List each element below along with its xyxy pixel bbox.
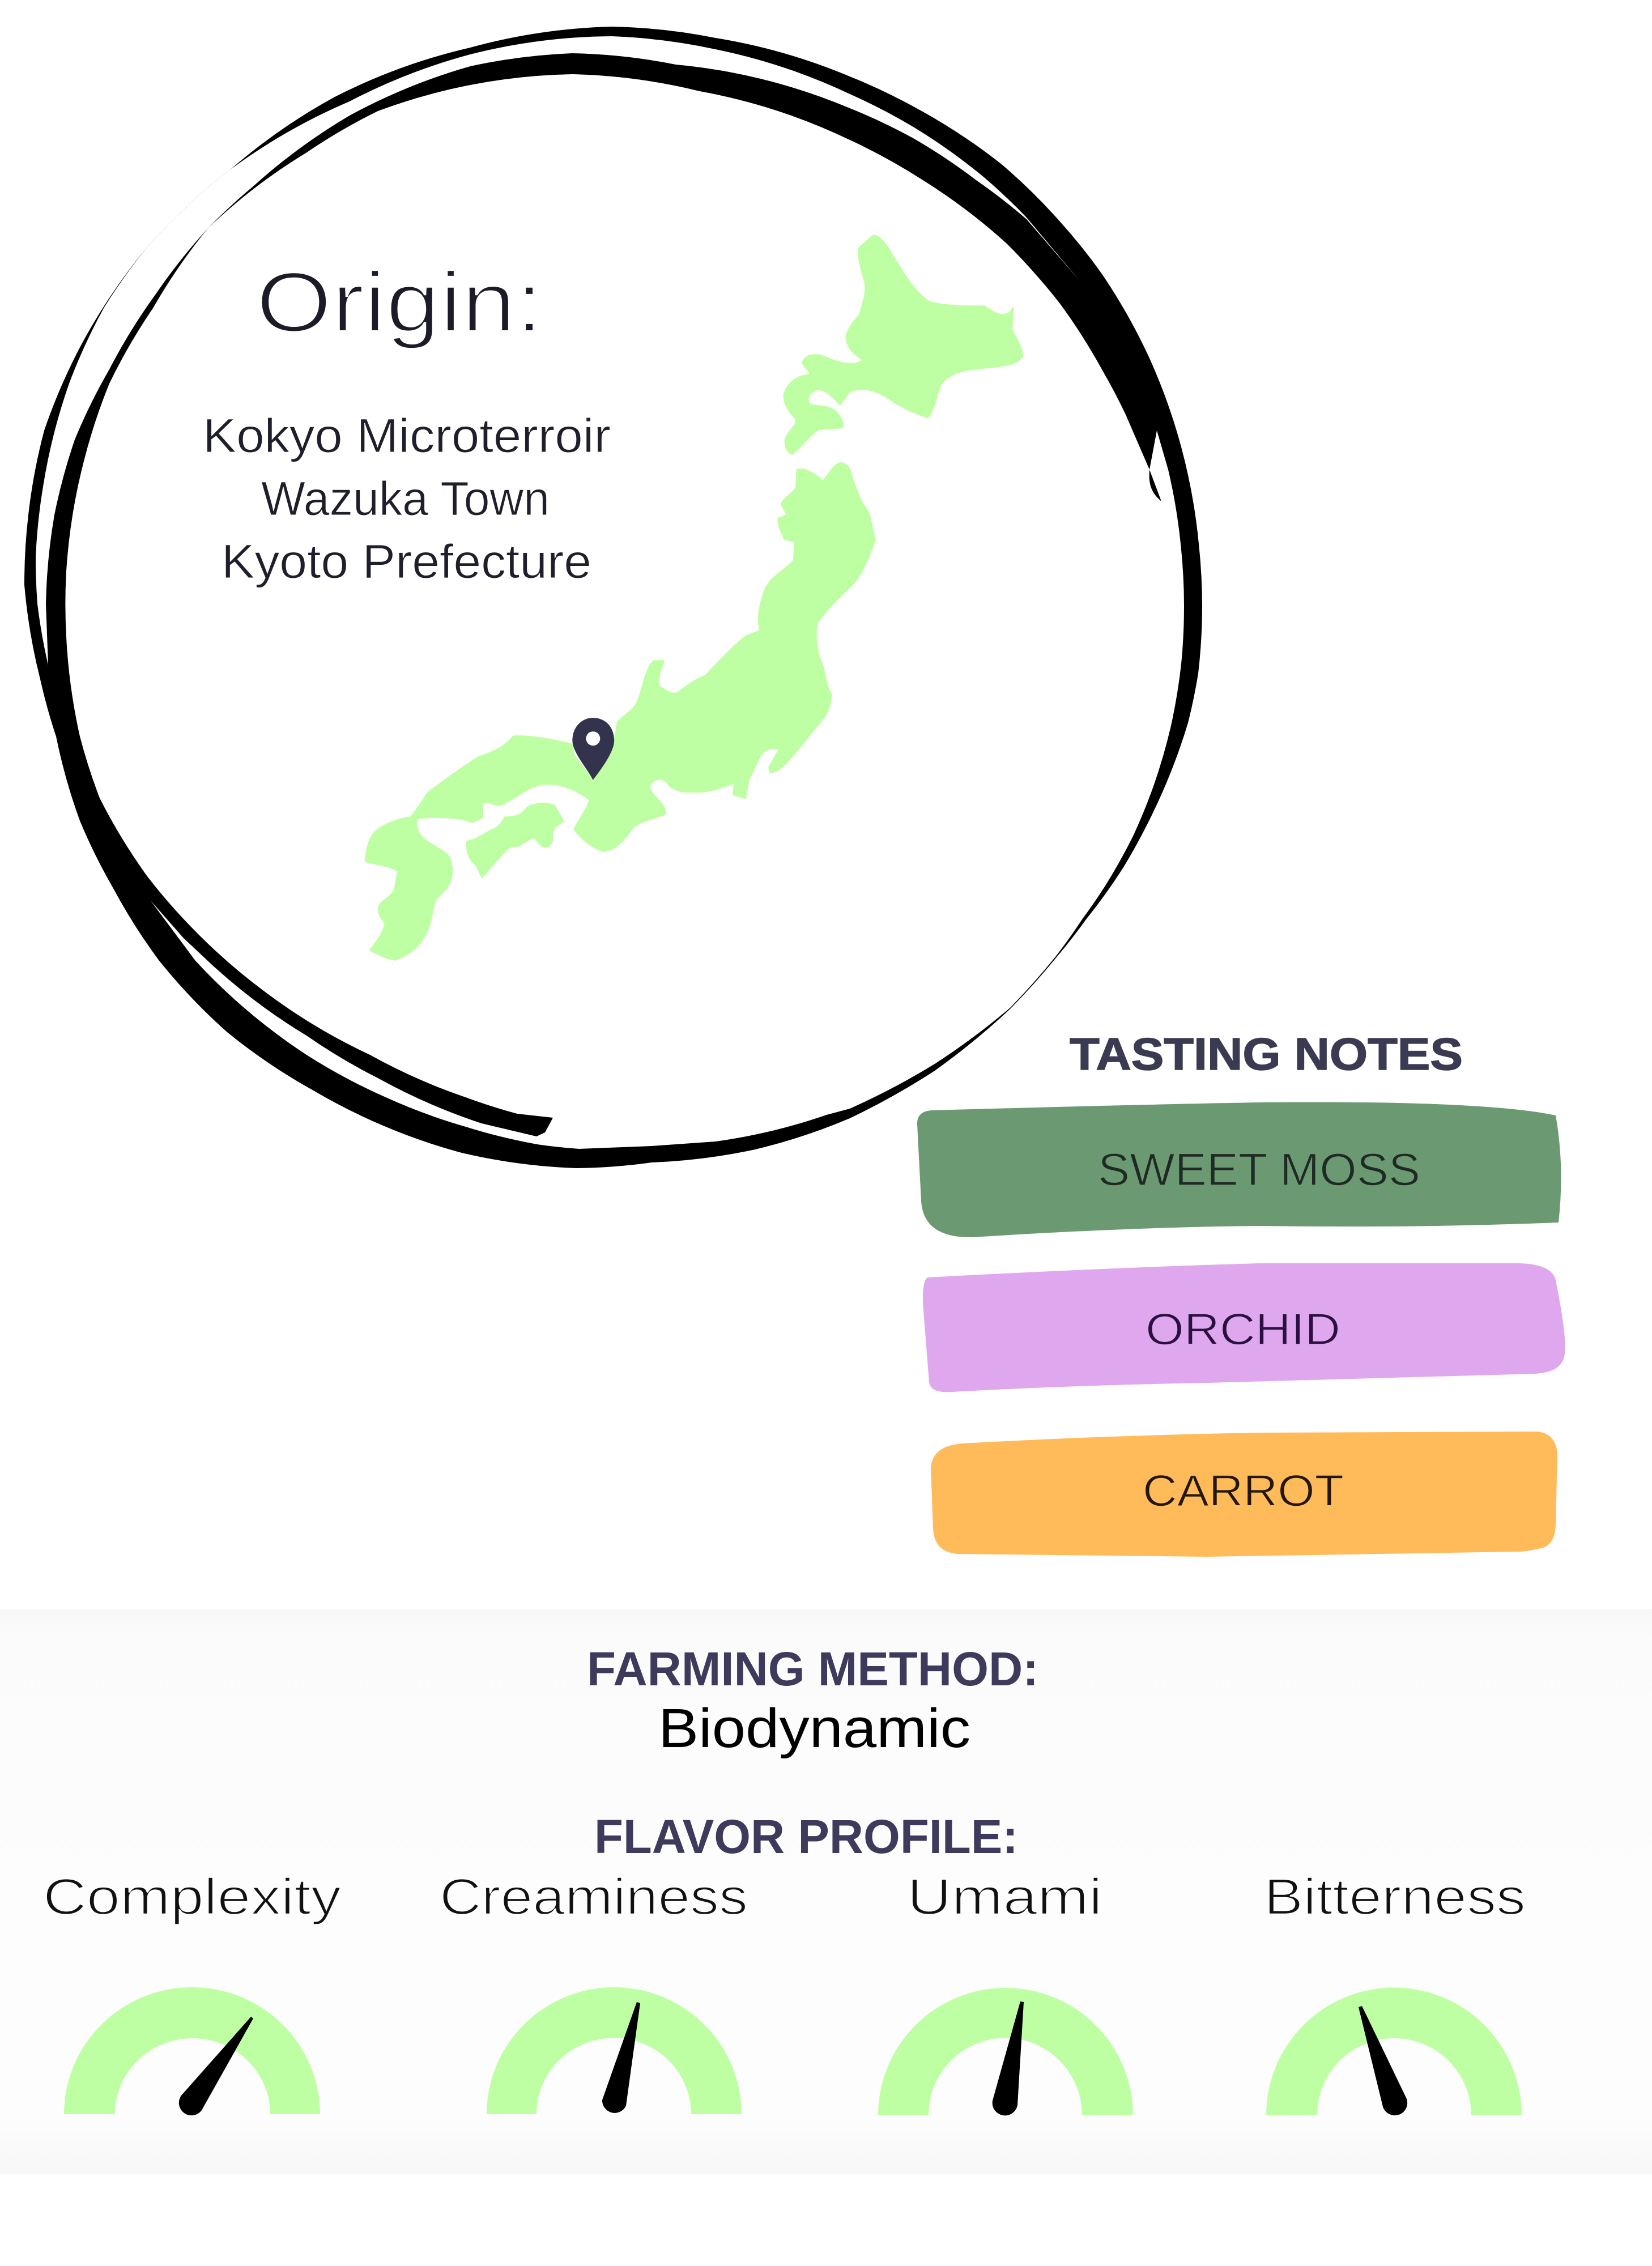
hand-drawn brush circle	[24, 27, 1202, 1168]
gauge: umami	[878, 1869, 1133, 2115]
heading: farming method: FARMING METHOD:	[587, 1642, 1038, 1696]
map: Hokkaido	[784, 235, 1023, 455]
gauge: complexity: Complexity	[43, 1869, 341, 1926]
gauge: creaminess: Creaminess	[440, 1869, 748, 1926]
tasting note: orchid	[923, 1263, 1565, 1392]
tasting note: orchid: ORCHID	[1146, 1304, 1340, 1354]
text block: origin details: Wazuka Town	[261, 472, 550, 525]
gauge: bitterness	[1264, 1869, 1526, 2115]
map: Shikoku	[466, 803, 564, 879]
text block: origin details: Kyoto Prefecture	[222, 535, 591, 588]
gauge: umami: Umami	[907, 1869, 1102, 1926]
map: Honshu and Kyushu	[365, 462, 876, 961]
text: biodynamic: Biodynamic	[658, 1697, 970, 1759]
gauge: creaminess	[440, 1869, 748, 2114]
map of Japan	[365, 235, 1023, 961]
tasting note: carrot: CARROT	[1143, 1466, 1344, 1515]
heading: tasting notes: TASTING NOTES	[1070, 1029, 1463, 1079]
tasting note: carrot	[931, 1432, 1557, 1557]
heading: Origin: Origin:	[256, 254, 543, 350]
text block: origin details	[203, 409, 611, 588]
text block: origin details: Kokyo Microterroir	[203, 409, 611, 462]
panel: lower background band	[0, 1609, 1652, 2174]
heading: flavor profile: FLAVOR PROFILE:	[594, 1810, 1018, 1863]
tasting note: sweet moss	[917, 1102, 1561, 1237]
icon: location pin	[572, 718, 614, 780]
gauge: complexity	[43, 1869, 341, 2115]
gauge: bitterness: Bitterness	[1264, 1869, 1526, 1926]
tasting note: sweet moss: SWEET MOSS	[1098, 1144, 1420, 1195]
